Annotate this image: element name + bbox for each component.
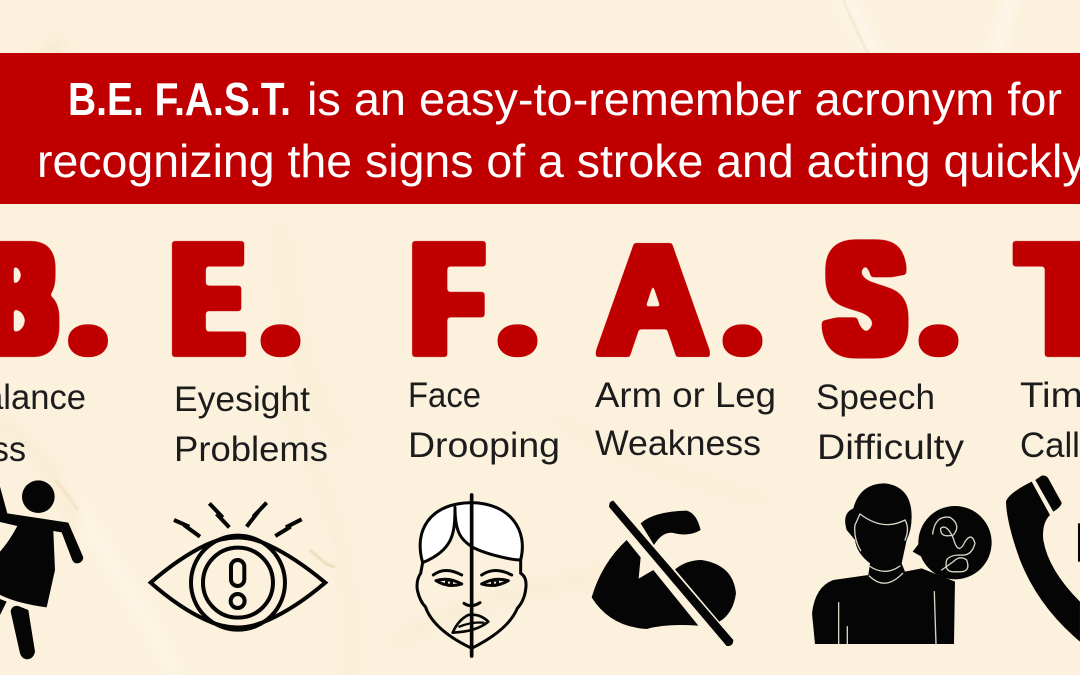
label: eyesight problems: Problems (174, 430, 328, 469)
label: eyesight problems (174, 380, 328, 469)
icon: falling person (0, 480, 83, 659)
label: face drooping: Drooping (408, 426, 560, 465)
letter A: . (740, 327, 745, 346)
label: time call (1020, 376, 1080, 465)
letter B (0, 210, 91, 387)
label: speech difficulty: Speech (816, 378, 935, 417)
letter F: F (415, 212, 480, 387)
banner line 1: B.E. F.A.S.T. (68, 73, 291, 125)
icon: drooping face (417, 495, 526, 656)
label: arm or leg weakness: Arm or Leg (595, 376, 776, 415)
letter F: . (515, 327, 520, 346)
label: eyesight problems: Eyesight (174, 380, 310, 419)
banner line 2: recognizing the signs of a stroke and acting quickly. (37, 135, 1080, 187)
icon: weak arm crossed out (592, 501, 736, 646)
letter E: E (176, 211, 240, 387)
letter A: A (598, 212, 708, 387)
icon: person with garbled speech (812, 483, 992, 644)
label: arm or leg weakness: Weakness (595, 424, 761, 463)
letter F (415, 212, 520, 387)
icon: telephone handset (1006, 476, 1080, 642)
letter S: . (936, 327, 941, 346)
label: speech difficulty: Difficulty (817, 428, 965, 467)
letter E (176, 211, 283, 387)
label: face drooping: Face (408, 376, 481, 415)
label: face drooping (408, 376, 560, 465)
letter B: . (85, 327, 91, 346)
letter S (828, 211, 941, 386)
label: balance loss (0, 378, 86, 469)
label: arm or leg weakness (595, 376, 776, 463)
label: speech difficulty (816, 378, 965, 467)
letter E: . (278, 327, 283, 346)
icon: eye with warning (151, 503, 325, 630)
red banner (0, 53, 1080, 204)
banner line 1: is an easy-to-remember acronym for (307, 73, 1062, 125)
letter S: S (828, 211, 903, 386)
